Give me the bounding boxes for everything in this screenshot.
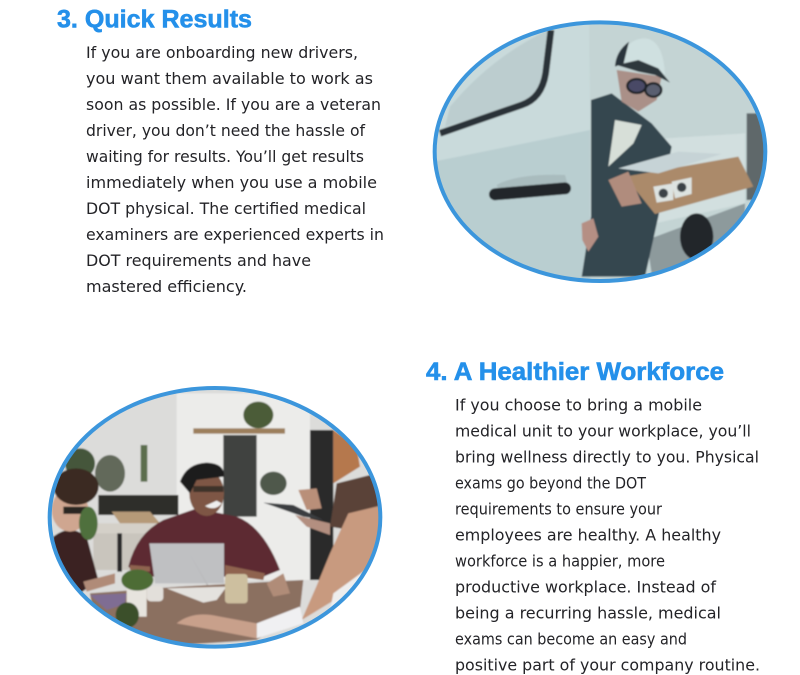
section 3 body text: DOT physical. The certified medical [86,200,366,218]
section 3 body text: If you are onboarding new drivers, [86,44,358,62]
section 3 body text [86,44,384,296]
section 4 heading: 4. A Healthier Workforce [426,358,724,386]
section 4 body text [455,396,760,674]
photo: team meeting around table [40,380,390,657]
section 3 body text: you want them available to work as [86,70,373,88]
section 4 body text: exams go beyond the DOT [455,474,646,492]
section 3 body text: mastered efficiency. [86,278,247,296]
section 3 body text: DOT requirements and have [86,252,311,270]
section 3 body text: examiners are experienced experts in [86,226,384,244]
driver head [617,70,662,112]
section 3 body text: driver, you don’t need the hassle of [86,122,366,140]
section 4 body text: positive part of your company routine. [455,656,760,674]
section 3 body text: immediately when you use a mobile [86,174,377,192]
van door [425,10,591,287]
section 4 body text: productive workplace. Instead of [455,578,717,596]
laptops [149,543,224,583]
left person [50,530,98,593]
driver glasses [627,79,646,93]
section 4 body text: requirements to ensure your [455,500,663,518]
section 4 body text: workforce is a happier, more [455,552,665,570]
section 4 body text: being a recurring hassle, medical [455,604,721,622]
photo: delivery driver with package at van [432,20,768,283]
section 4 body text: bring wellness directly to you. Physical [455,448,759,466]
shelf and plants [193,428,285,434]
section 4 body text: If you choose to bring a mobile [455,396,702,414]
back counter [98,495,178,515]
centre man [128,508,280,577]
right people [333,430,360,483]
section 4 body text: employees are healthy. A healthy [455,526,721,544]
driver jacket [582,93,672,277]
package [625,157,753,214]
section 3 body text: soon as possible. If you are a veteran [86,96,381,114]
background van [647,203,745,273]
hand on door [582,218,598,252]
section 3 heading: 3. Quick Results [57,6,252,34]
section 4 body text: exams can become an easy and [455,630,687,648]
section 4 body text: medical unit to your workplace, you’ll [455,422,751,440]
table [90,580,303,647]
section 3 body text: waiting for results. You’ll get results [86,148,364,166]
